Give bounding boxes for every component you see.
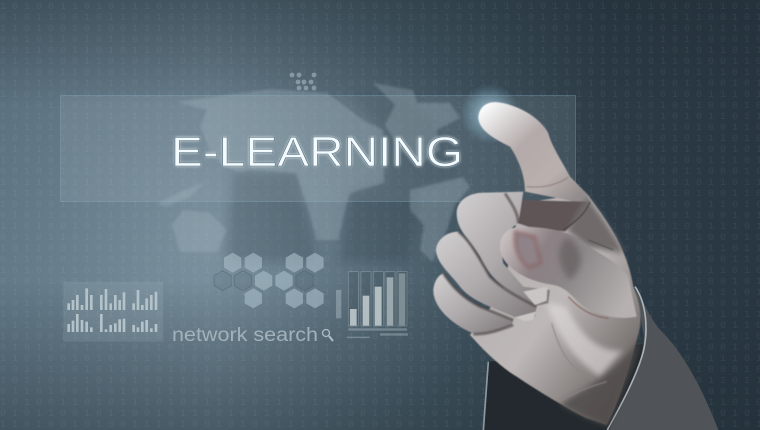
palm [470, 193, 640, 425]
jacket sleeve and shirt cuff [483, 287, 719, 430]
little finger [433, 273, 513, 334]
wrist shadow [560, 337, 642, 427]
small bars panel [63, 282, 163, 342]
middle finger [457, 192, 550, 307]
finger nails [515, 287, 547, 322]
label: network search: network search [172, 325, 318, 346]
knuckle shade on thumb [559, 237, 581, 280]
hand crease lines [527, 177, 613, 402]
world map [158, 83, 470, 262]
dark ocean areas of the map [226, 95, 460, 262]
icon: magnifier [322, 330, 333, 341]
glass panel [60, 96, 576, 202]
hand pointing at the panel [433, 102, 642, 427]
upper bar rows [67, 288, 157, 332]
title: E-LEARNING: E-LEARNING [171, 128, 463, 175]
fingertip glow [460, 84, 520, 144]
thumb nail [515, 232, 541, 267]
hexagon network [214, 253, 324, 308]
shadow under index finger [518, 200, 588, 232]
thumb [500, 227, 637, 318]
index finger [478, 102, 592, 205]
palm highlight [547, 303, 623, 377]
tall bar chart [336, 272, 408, 338]
shadows between fingers [443, 193, 537, 334]
ring finger [436, 232, 537, 322]
knuckle wrinkles [567, 197, 623, 253]
small network icon [290, 73, 316, 90]
